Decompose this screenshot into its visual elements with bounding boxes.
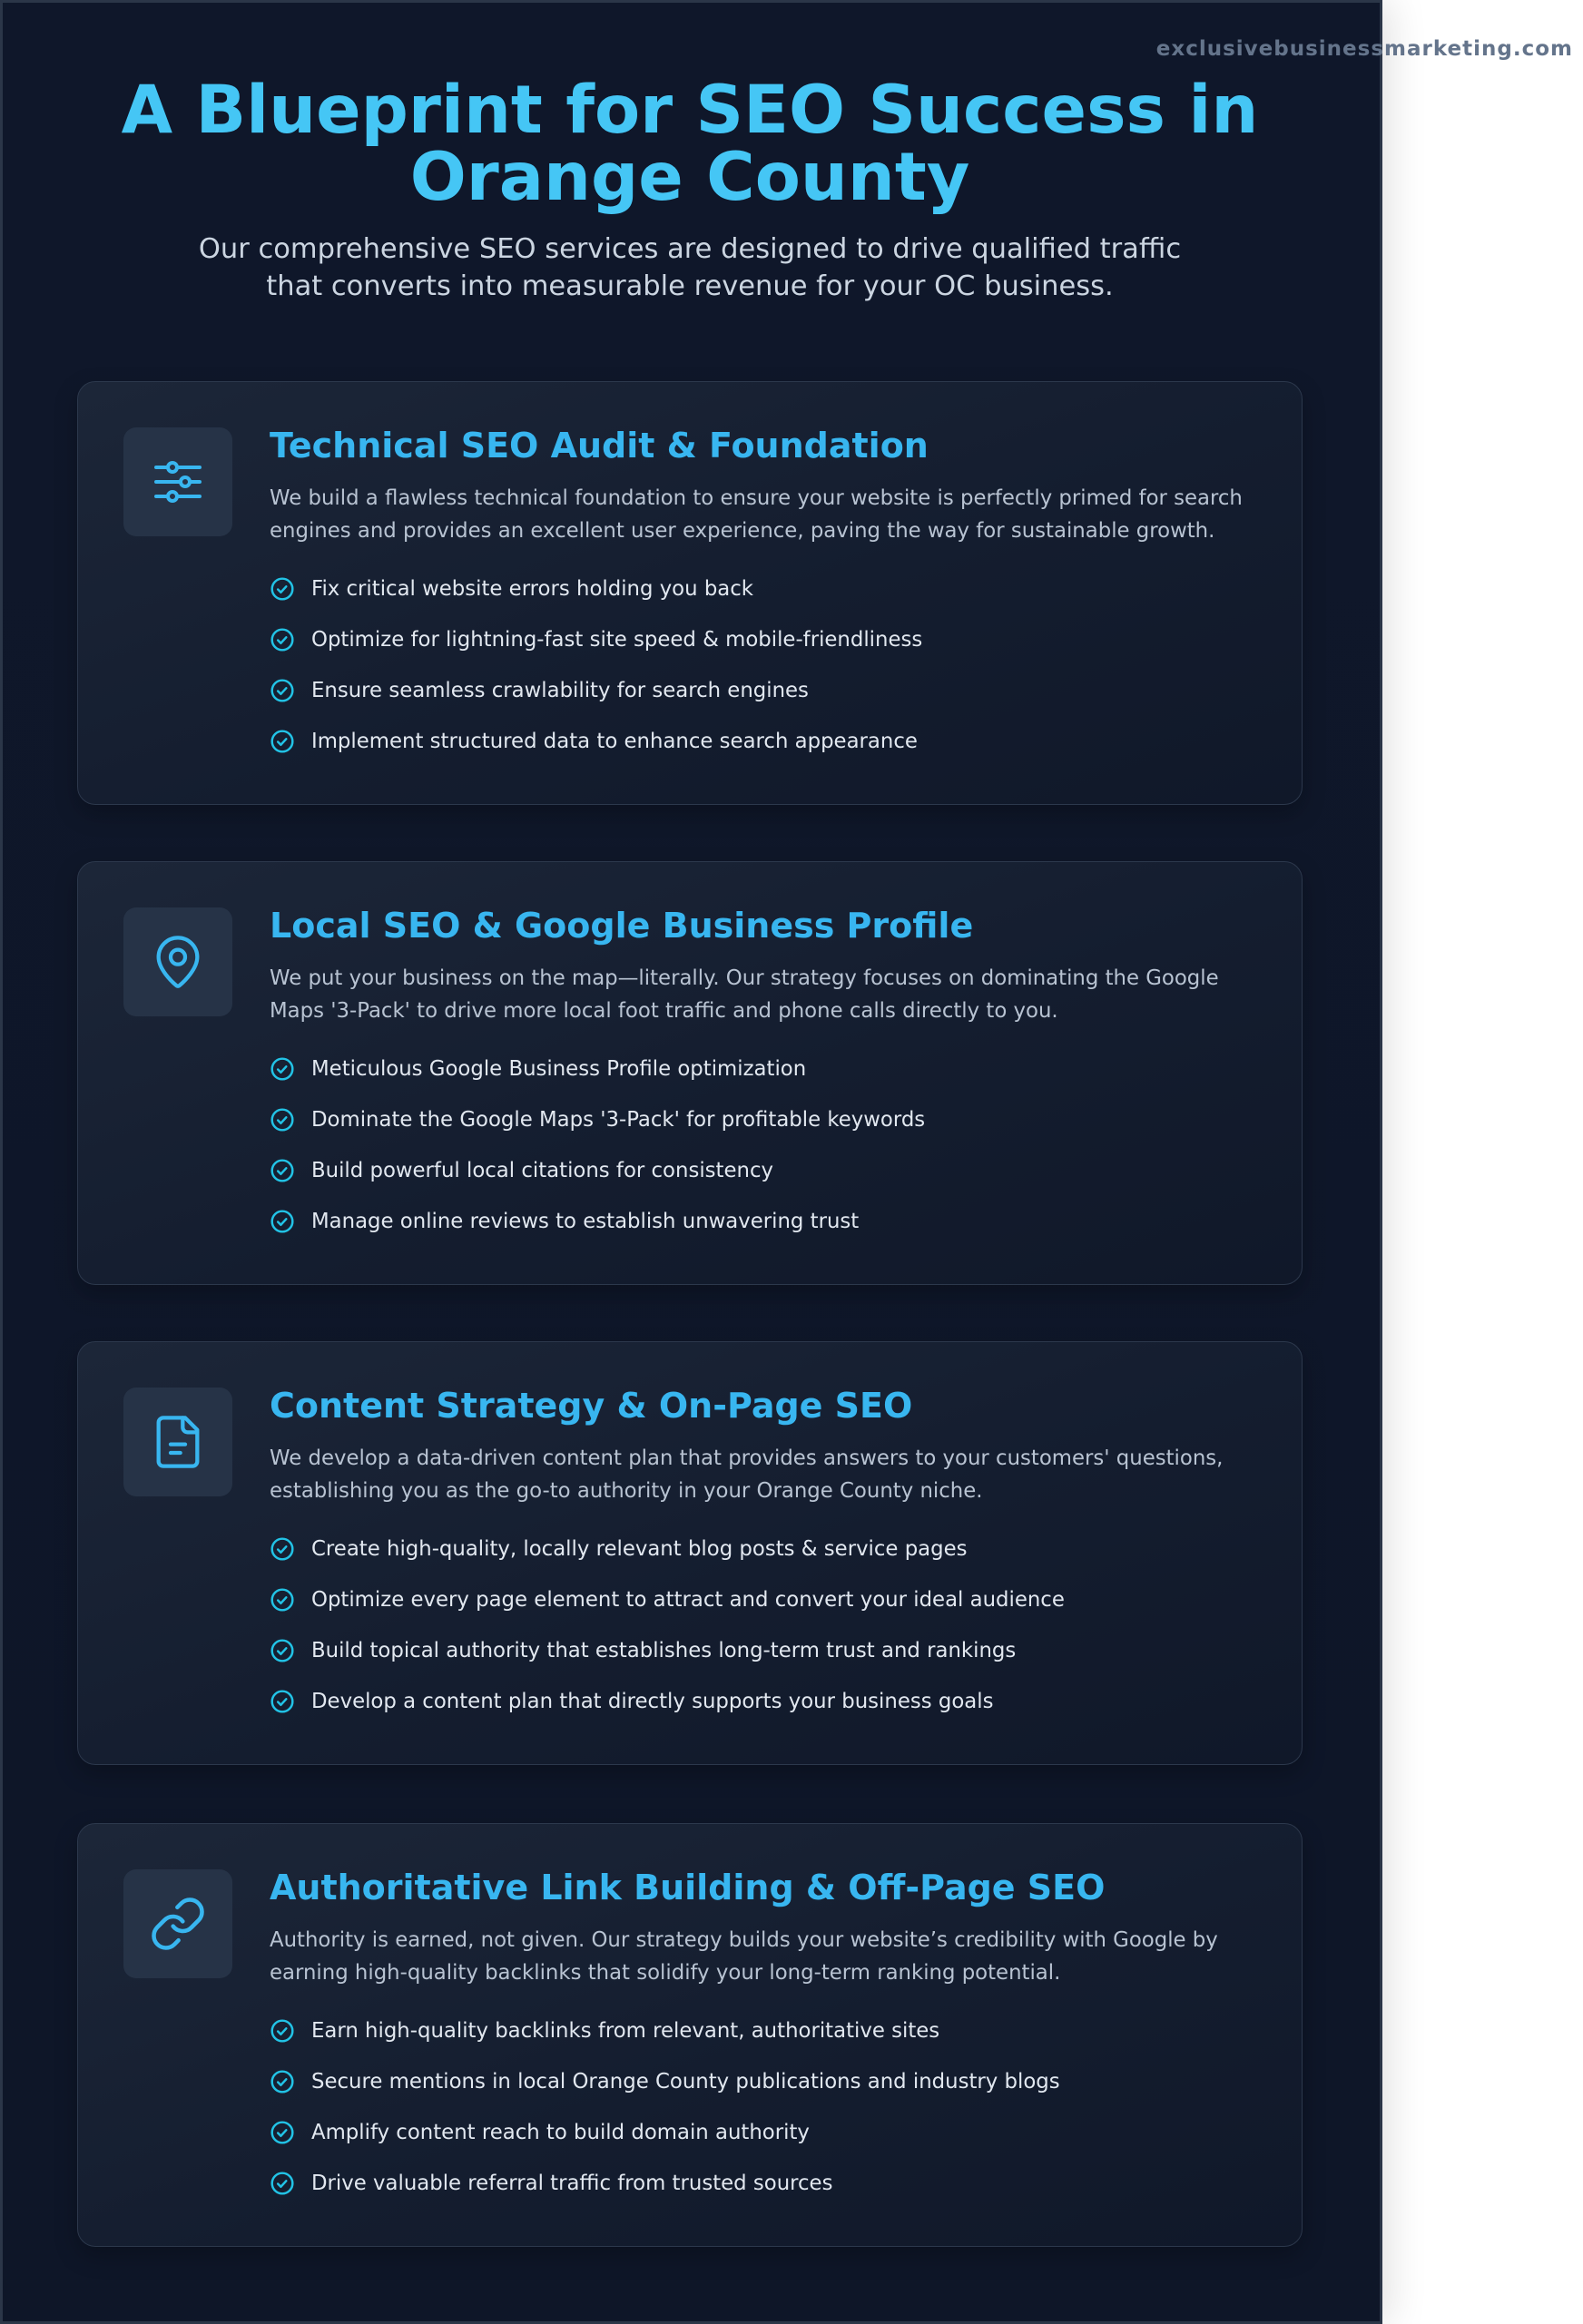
checklist: Earn high-quality backlinks from relevant, authoritative sites [311,2019,939,2043]
checklist [270,1537,1065,1713]
title: A Blueprint for SEO Success in [122,72,1258,149]
checklist: Drive valuable referral traffic from trusted sources [311,2172,832,2195]
checklist: Amplify content reach to build domain authority [311,2121,810,2144]
checklist: Optimize for lightning-fast site speed & mobile-friendliness [311,628,922,652]
checklist: Implement structured data to enhance search appearance [311,730,918,753]
icon: map pin [123,907,232,1016]
subtitle [199,233,1181,302]
heading: Content Strategy & On-Page SEO [270,1386,912,1426]
checklist: Build topical authority that establishes long-term trust and rankings [311,1639,1016,1662]
checklist: Manage online reviews to establish unwavering trust [311,1210,859,1233]
panel: technical SEO [77,381,1303,805]
panel: content strategy [77,1341,1303,1765]
checklist: Build powerful local citations for consistency [311,1159,773,1182]
checklist: Optimize every page element to attract and convert your ideal audience [311,1588,1065,1612]
checklist [270,577,922,753]
icon: document [123,1388,232,1496]
icon: sliders [123,427,232,536]
heading: Technical SEO Audit & Foundation [270,426,929,466]
checklist: Develop a content plan that directly supports your business goals [311,1690,993,1713]
heading: Authoritative Link Building & Off-Page SEO [270,1868,1105,1907]
description: We develop a data-driven content plan that provides answers to your customers' questions, establishing you as the go-to authority in your Orange County niche. [270,1446,1223,1503]
watermark: exclusivebusinessmarketing.com [1156,37,1573,61]
subtitle: Our comprehensive SEO services are designed to drive qualified traffic [199,233,1181,265]
checklist: Secure mentions in local Orange County publications and industry blogs [311,2070,1060,2094]
description: We put your business on the map—literally. Our strategy focuses on dominating the Google Maps '3-Pack' to drive more local foot traffic and phone calls directly to you. [270,966,1219,1023]
checklist: Create high-quality, locally relevant blog posts & service pages [311,1537,968,1561]
checklist: Ensure seamless crawlability for search engines [311,679,809,702]
checklist: Fix critical website errors holding you back [311,577,753,601]
description: Authority is earned, not given. Our strategy builds your website’s credibility with Google by earning high-quality backlinks that solidify your long-term ranking potential. [270,1928,1218,1985]
title [122,72,1258,216]
panel: link building [77,1823,1303,2247]
checklist: Meticulous Google Business Profile optimization [311,1057,806,1081]
heading: Local SEO & Google Business Profile [270,906,973,946]
icon: chain link [123,1869,232,1978]
description: We build a flawless technical foundation to ensure your website is perfectly primed for search engines and provides an excellent user experience, paving the way for sustainable growth. [270,486,1243,543]
subtitle: that converts into measurable revenue for your OC business. [266,270,1114,302]
checklist [270,1057,925,1233]
title: Orange County [410,139,969,216]
checklist: Dominate the Google Maps '3-Pack' for profitable keywords [311,1108,925,1132]
checklist [270,2019,1060,2195]
panel: local SEO [77,861,1303,1285]
